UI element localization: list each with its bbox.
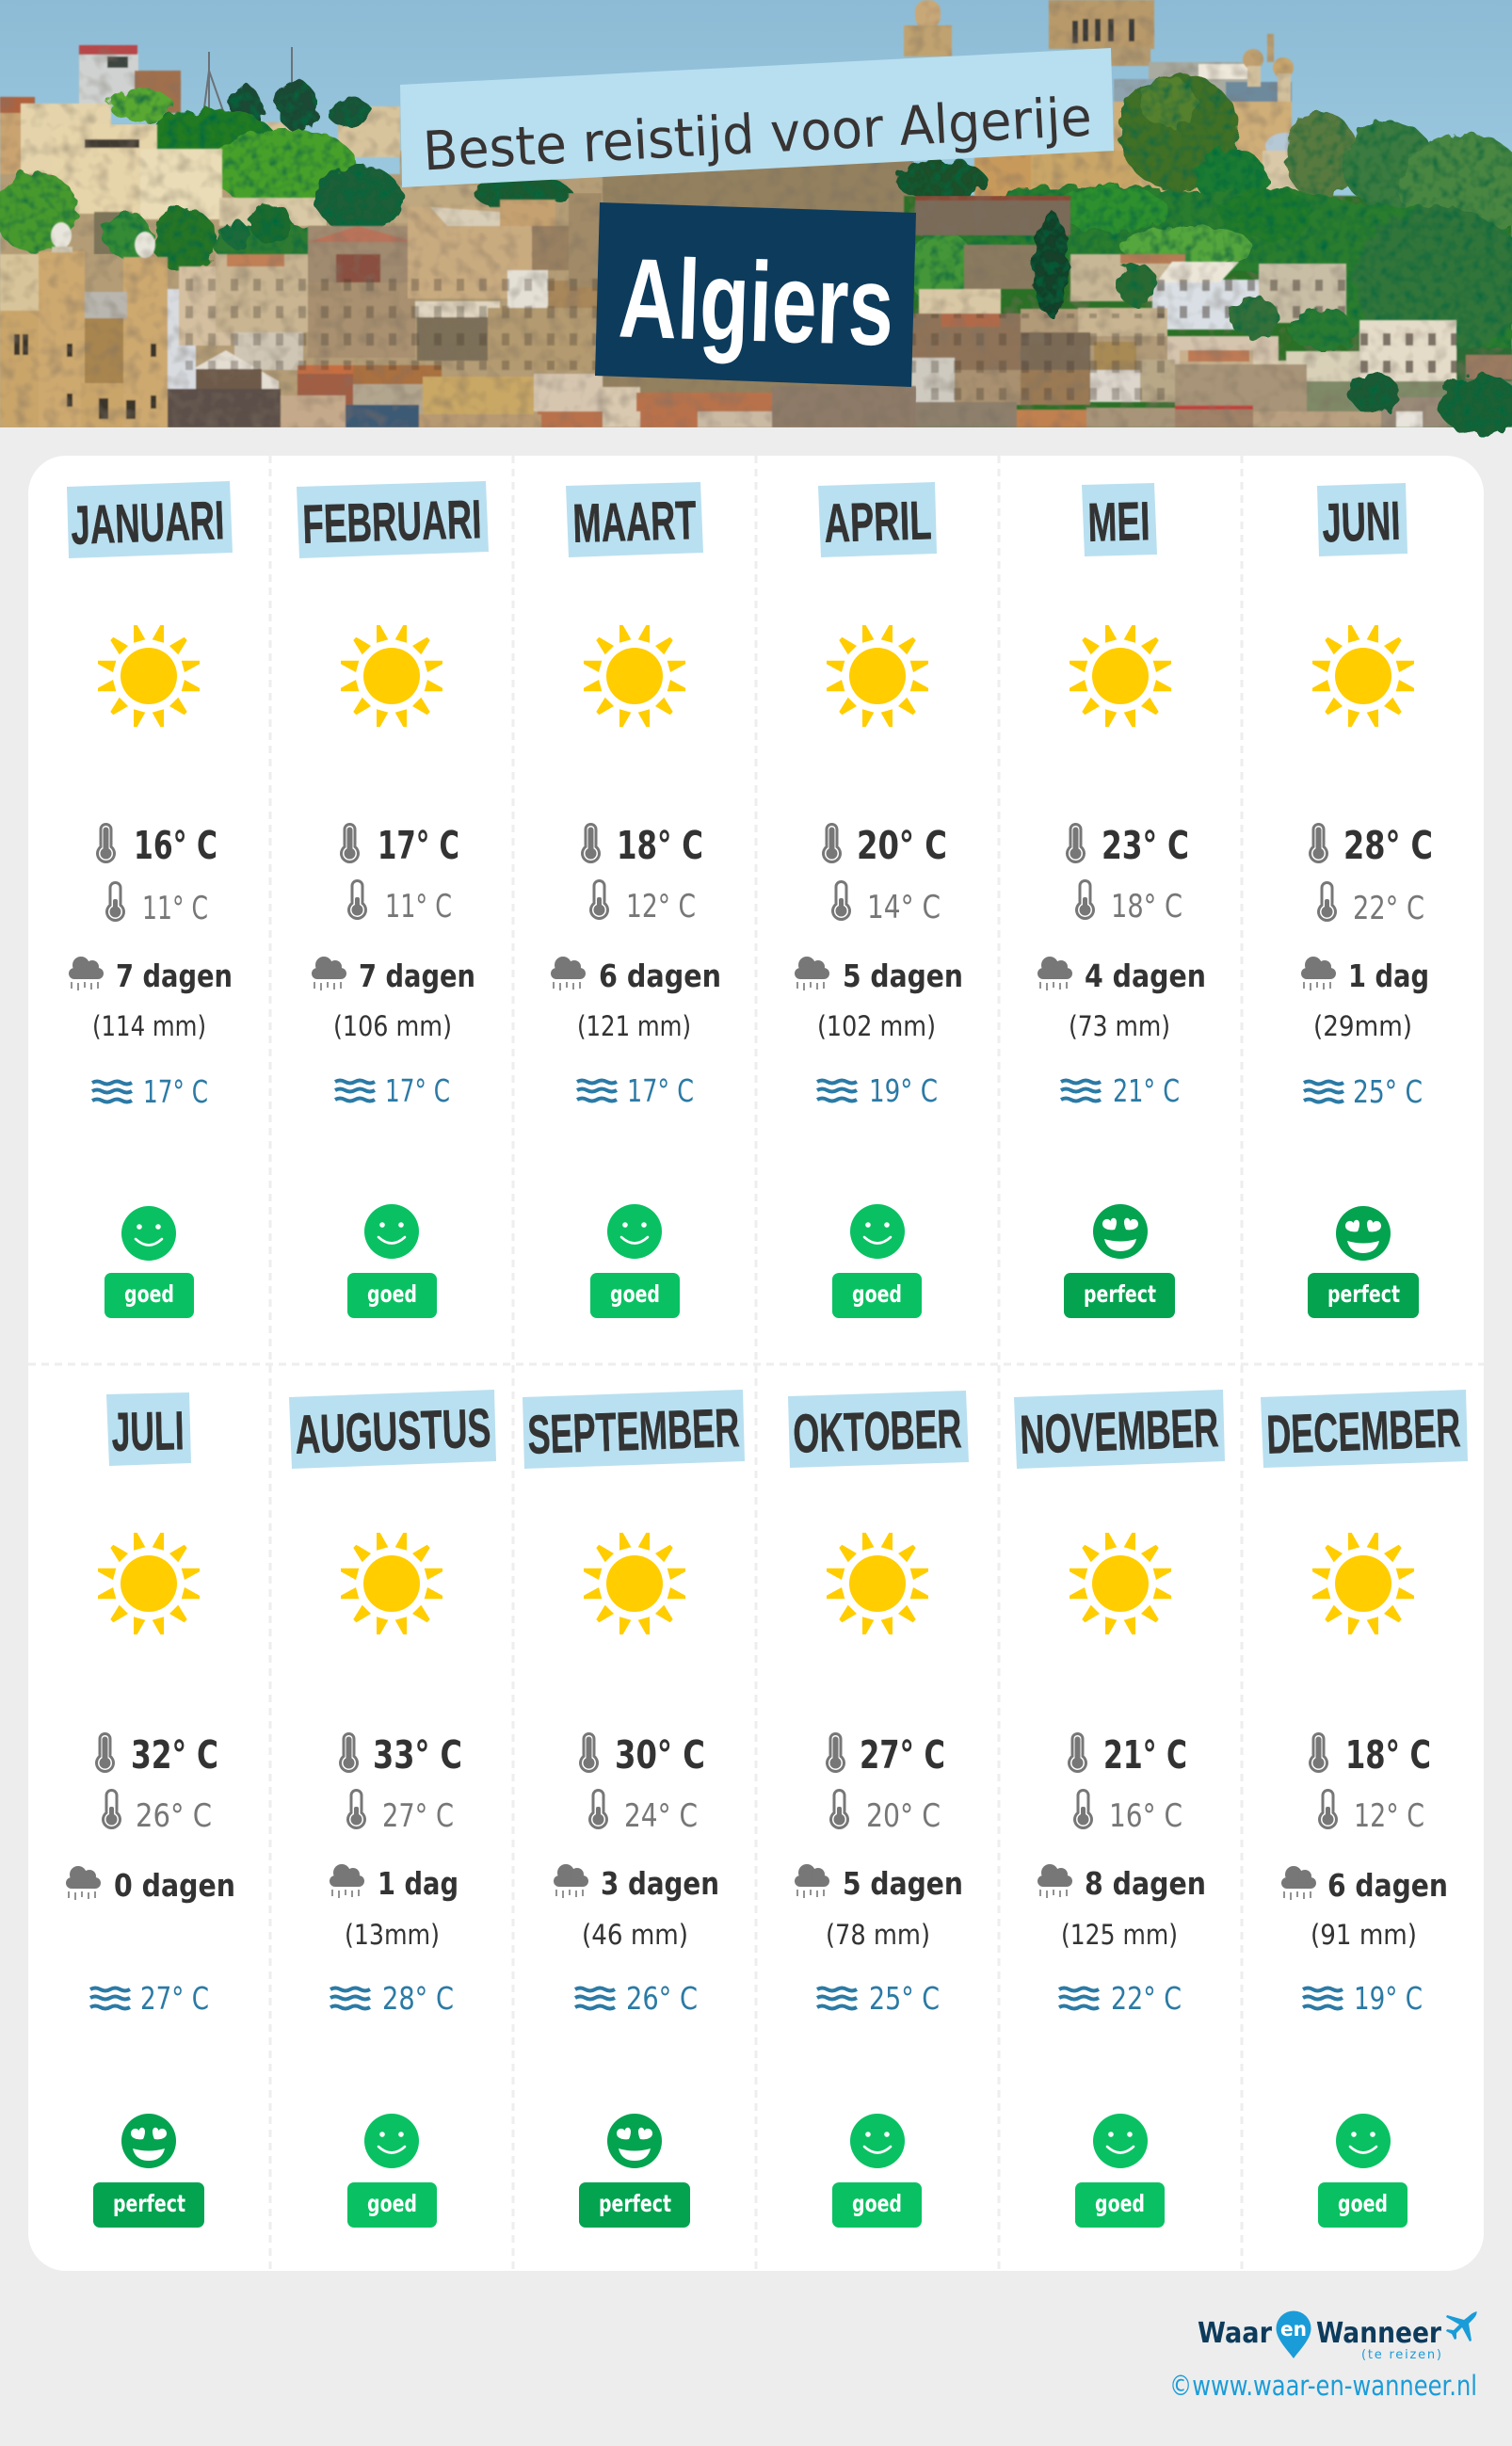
icon: rain cloud xyxy=(551,957,586,990)
max temperature: 16° C xyxy=(134,823,217,868)
rainfall: (91 mm) xyxy=(1311,1919,1417,1951)
icon: thermometer high xyxy=(340,823,360,863)
badge: perfect xyxy=(1308,1273,1419,1318)
icon: thermometer high xyxy=(826,1732,845,1773)
panel: juni xyxy=(1301,483,1433,1318)
icon: rain cloud xyxy=(1037,1864,1072,1898)
month label: MEI xyxy=(1087,491,1150,554)
month label: MAART xyxy=(572,490,697,555)
badge: perfect: perfect xyxy=(1327,1280,1400,1308)
min temperature: 20° C xyxy=(866,1797,941,1835)
icon: smiley good xyxy=(1093,2114,1148,2168)
max temperature: 33° C xyxy=(373,1732,462,1778)
month label xyxy=(818,482,937,557)
sea temperature: 19° C xyxy=(869,1072,938,1109)
max temperature: 30° C xyxy=(615,1732,705,1778)
sea temperature: 22° C xyxy=(1111,1980,1182,2017)
panel: februari xyxy=(297,481,489,1318)
max temperature: 17° C xyxy=(378,823,459,868)
min temperature: 22° C xyxy=(1353,890,1424,927)
panel: november xyxy=(1014,1390,1225,2228)
min temperature: 18° C xyxy=(1111,888,1182,925)
icon: thermometer low xyxy=(105,881,125,922)
icon: thermometer low xyxy=(1317,881,1337,922)
icon: thermometer high xyxy=(1068,1732,1087,1773)
min temperature: 27° C xyxy=(382,1797,454,1835)
icon: waves xyxy=(575,1988,615,2009)
rain days: 0 dagen xyxy=(114,1867,235,1904)
max temperature: 18° C xyxy=(617,823,703,868)
icon: thermometer low xyxy=(346,1789,366,1829)
month label xyxy=(1014,1390,1225,1469)
icon: thermometer high xyxy=(339,1732,359,1773)
badge: goed xyxy=(832,1273,922,1318)
icon: smiley perfect xyxy=(1093,1204,1148,1259)
rain days: 3 dagen xyxy=(601,1865,719,1902)
hero photo: Algiers hillside xyxy=(0,0,1512,435)
min temperature: 11° C xyxy=(142,890,208,927)
badge: goed: goed xyxy=(852,1280,902,1308)
badge: goed: goed xyxy=(610,1280,660,1308)
badge: goed xyxy=(1318,2182,1407,2228)
icon: thermometer low xyxy=(102,1789,121,1829)
month label: JUNI xyxy=(1321,491,1401,554)
icon: rain cloud xyxy=(312,957,346,990)
icon: smiley good xyxy=(607,1204,662,1259)
icon: waves xyxy=(1303,1988,1343,2009)
icon: sun xyxy=(98,1533,200,1634)
rainfall: (46 mm) xyxy=(582,1919,688,1951)
city name banner xyxy=(595,202,916,387)
logo: Waar en Wanneer: Waar xyxy=(1198,2317,1272,2350)
icon: rain cloud xyxy=(69,957,104,990)
icon: thermometer high xyxy=(579,1732,599,1773)
rain days: 4 dagen xyxy=(1085,957,1206,994)
month label xyxy=(1082,483,1157,556)
rain days: 5 dagen xyxy=(843,957,963,994)
max temperature: 32° C xyxy=(131,1732,218,1778)
badge: goed xyxy=(832,2182,922,2228)
sea temperature: 17° C xyxy=(627,1072,694,1109)
sea temperature: 28° C xyxy=(382,1980,454,2017)
icon: sun xyxy=(1312,625,1414,727)
icon: smiley perfect xyxy=(1336,1206,1391,1261)
icon: thermometer low xyxy=(1073,1789,1093,1829)
month label xyxy=(297,481,489,558)
rainfall: (106 mm) xyxy=(333,1010,452,1042)
month label xyxy=(566,482,703,557)
icon: rain cloud xyxy=(330,1864,364,1898)
icon: sun xyxy=(827,625,928,727)
icon: airplane xyxy=(1446,2311,1477,2341)
panel: december xyxy=(1261,1390,1468,2228)
icon: thermometer high xyxy=(581,823,601,863)
icon: thermometer low xyxy=(1318,1789,1338,1829)
icon: sun xyxy=(584,1533,685,1634)
badge: perfect: perfect xyxy=(1084,1280,1156,1308)
rain days: 7 dagen xyxy=(116,957,233,994)
panel: september xyxy=(523,1390,745,2228)
badge: perfect: perfect xyxy=(113,2190,185,2217)
badge: goed: goed xyxy=(367,2190,417,2217)
badge: goed xyxy=(105,1273,194,1318)
icon: thermometer low xyxy=(347,879,367,920)
icon: rain cloud xyxy=(1301,957,1336,990)
min temperature: 12° C xyxy=(1354,1797,1424,1835)
icon: thermometer high xyxy=(1309,823,1328,863)
icon: map pin xyxy=(1277,2310,1311,2358)
badge: goed xyxy=(1075,2182,1165,2228)
icon: rain cloud xyxy=(795,957,829,990)
rain days: 1 dag xyxy=(1348,957,1429,994)
panel: januari xyxy=(67,481,233,1318)
title banner xyxy=(400,48,1114,187)
icon: waves xyxy=(90,1988,130,2009)
rain days: 1 dag xyxy=(378,1865,458,1902)
icon: waves xyxy=(1059,1988,1099,2009)
icon: smiley good xyxy=(364,2114,419,2168)
rainfall: (121 mm) xyxy=(577,1010,691,1042)
icon: thermometer high xyxy=(822,823,842,863)
max temperature: 18° C xyxy=(1345,1732,1431,1778)
icon: rain cloud xyxy=(1281,1866,1316,1900)
icon: thermometer low xyxy=(588,1789,608,1829)
min temperature: 12° C xyxy=(626,888,696,925)
icon: sun xyxy=(584,625,685,727)
month label xyxy=(106,1392,191,1466)
sea temperature: 25° C xyxy=(1353,1073,1423,1110)
icon: waves xyxy=(577,1081,617,1102)
icon: smiley perfect xyxy=(121,2114,176,2168)
max temperature: 27° C xyxy=(860,1732,945,1778)
badge: perfect: perfect xyxy=(599,2190,671,2217)
rainfall: (78 mm) xyxy=(826,1919,930,1951)
icon: sun xyxy=(1312,1533,1414,1634)
rainfall: (29mm) xyxy=(1313,1010,1412,1042)
month label: JANUARI xyxy=(70,490,225,556)
icon: waves xyxy=(335,1081,375,1102)
sea temperature: 17° C xyxy=(143,1073,208,1110)
min temperature: 24° C xyxy=(624,1797,698,1835)
badge: goed: goed xyxy=(367,1280,417,1308)
icon: thermometer low xyxy=(589,879,609,920)
rain days: 6 dagen xyxy=(1327,1867,1448,1904)
sea temperature: 25° C xyxy=(869,1980,940,2017)
logo: Waar en Wanneer: en xyxy=(1280,2318,1307,2341)
icon: rain cloud xyxy=(554,1864,588,1898)
month label: FEBRUARI xyxy=(301,489,482,555)
min temperature: 16° C xyxy=(1109,1797,1182,1835)
icon: sun xyxy=(98,625,200,727)
month label: APRIL xyxy=(823,490,932,555)
logo: Waar en Wanneer: Wanneer xyxy=(1316,2317,1441,2350)
month label xyxy=(788,1391,969,1468)
panel: months card xyxy=(28,456,1484,2271)
sea temperature: 27° C xyxy=(140,1980,209,2017)
panel: april xyxy=(795,482,963,1318)
icon: smiley good xyxy=(850,1204,905,1259)
rain days: 5 dagen xyxy=(843,1865,963,1902)
rain days: 8 dagen xyxy=(1085,1865,1206,1902)
badge: goed: goed xyxy=(1095,2190,1145,2217)
rain days: 6 dagen xyxy=(599,957,721,994)
rainfall: (125 mm) xyxy=(1061,1919,1178,1951)
month label: OKTOBER xyxy=(792,1398,962,1465)
panel: mei xyxy=(1037,483,1206,1318)
sea temperature: 17° C xyxy=(385,1072,450,1109)
icon: rain cloud xyxy=(795,1864,829,1898)
badge: perfect xyxy=(1064,1273,1175,1318)
month label: NOVEMBER xyxy=(1019,1397,1219,1466)
icon: waves xyxy=(1304,1081,1343,1102)
sea temperature: 26° C xyxy=(626,1980,698,2017)
sea temperature: 19° C xyxy=(1354,1980,1423,2017)
badge: goed: goed xyxy=(124,1280,174,1308)
month label: JULI xyxy=(111,1400,185,1463)
icon: sun xyxy=(1070,625,1171,727)
month label: SEPTEMBER xyxy=(526,1397,740,1466)
icon: rain cloud xyxy=(66,1866,101,1900)
month label xyxy=(523,1390,745,1469)
icon: sun xyxy=(341,625,442,727)
logo: Waar en Wanneer xyxy=(1198,2310,1477,2362)
logo: Waar en Wanneer: (te reizen) xyxy=(1361,2348,1441,2362)
icon: thermometer high xyxy=(1309,1732,1328,1773)
badge: perfect xyxy=(93,2182,204,2228)
panel: maart xyxy=(551,482,721,1318)
icon: thermometer high xyxy=(96,823,116,863)
icon: smiley good xyxy=(121,1206,176,1261)
icon: smiley good xyxy=(1336,2114,1391,2168)
rainfall: (73 mm) xyxy=(1069,1010,1170,1042)
rainfall: (13mm) xyxy=(345,1919,440,1951)
max temperature: 20° C xyxy=(857,823,947,868)
icon: waves xyxy=(330,1988,370,2009)
icon: smiley good xyxy=(364,1204,419,1259)
min temperature: 11° C xyxy=(385,888,452,925)
min temperature: 26° C xyxy=(136,1797,212,1835)
rainfall: (114 mm) xyxy=(92,1010,206,1042)
panel: juli xyxy=(66,1392,235,2228)
panel: augustus xyxy=(289,1390,496,2228)
max temperature: 28° C xyxy=(1343,823,1433,868)
month label xyxy=(289,1390,496,1469)
icon: smiley perfect xyxy=(607,2114,662,2168)
icon: rain cloud xyxy=(1037,957,1072,990)
badge: goed xyxy=(347,1273,437,1318)
panel: oktober xyxy=(788,1391,969,2228)
badge: goed: goed xyxy=(852,2190,902,2217)
badge: goed: goed xyxy=(1338,2190,1388,2217)
month label xyxy=(67,481,233,558)
badge: goed xyxy=(590,1273,680,1318)
month label: AUGUSTUS xyxy=(294,1397,491,1466)
icon: sun xyxy=(341,1533,442,1634)
icon: sun xyxy=(1070,1533,1171,1634)
icon: waves xyxy=(817,1988,857,2009)
icon: thermometer high xyxy=(1066,823,1086,863)
min temperature: 14° C xyxy=(867,889,941,926)
icon: waves xyxy=(817,1081,857,1102)
icon: sun xyxy=(827,1533,928,1634)
icon: thermometer low xyxy=(831,880,851,921)
badge: perfect xyxy=(579,2182,690,2228)
icon: smiley good xyxy=(850,2114,905,2168)
sea temperature: 21° C xyxy=(1113,1072,1180,1109)
badge: goed xyxy=(347,2182,437,2228)
max temperature: 21° C xyxy=(1103,1732,1187,1778)
max temperature: 23° C xyxy=(1102,823,1189,868)
month label xyxy=(1317,483,1407,556)
icon: waves xyxy=(92,1081,132,1102)
icon: waves xyxy=(1061,1081,1101,1102)
city name banner: Algiers xyxy=(617,234,895,370)
rain days: 7 dagen xyxy=(359,957,475,994)
title banner: Beste reistijd voor Algerije xyxy=(422,86,1093,184)
icon: thermometer low xyxy=(1075,879,1095,920)
icon: thermometer high xyxy=(95,1732,115,1773)
icon: thermometer low xyxy=(829,1789,849,1829)
rainfall: (102 mm) xyxy=(817,1010,936,1042)
